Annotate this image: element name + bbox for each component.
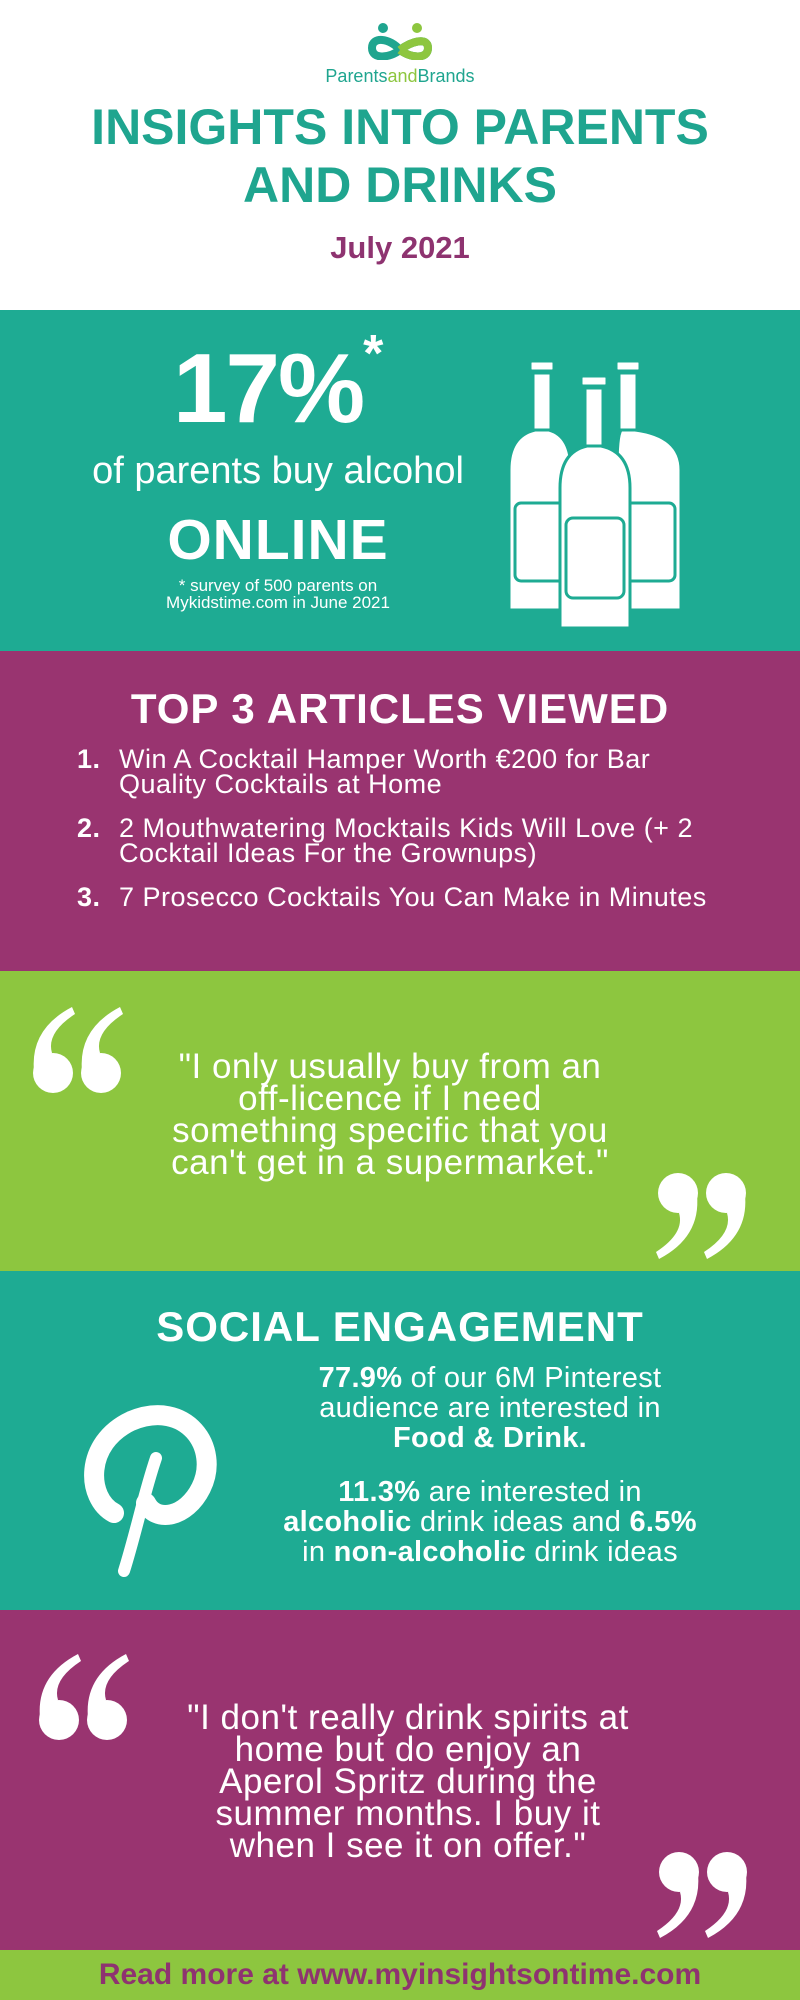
quote text: summer months. I buy it: [216, 1794, 600, 1833]
icon: open quote: [39, 1654, 129, 1740]
quote text: when I see it on offer.": [230, 1826, 586, 1865]
title: AND DRINKS: [243, 157, 557, 213]
title: [91, 99, 709, 213]
stats text: audience are interested in: [319, 1392, 661, 1424]
footer link text: Read more at www.myinsightsontime.com: [99, 1958, 701, 1991]
quote text: home but do enjoy an: [235, 1730, 581, 1769]
stat 17%: 17%*: [173, 325, 381, 443]
footnote: Mykidstime.com in June 2021: [166, 593, 390, 612]
logo: ParentsandBrands: [325, 66, 475, 86]
date: July 2021: [330, 230, 470, 265]
panel: quote 2: [0, 1610, 800, 1950]
online: ONLINE: [167, 508, 389, 572]
footnote: [166, 576, 390, 612]
list: Win A Cocktail Hamper Worth €200 for Bar: [119, 744, 650, 774]
heading: SOCIAL ENGAGEMENT: [156, 1303, 644, 1350]
heading: TOP 3 ARTICLES VIEWED: [131, 685, 669, 732]
panel: online stat: [0, 310, 800, 651]
stats text: alcoholic drink ideas and 6.5%: [283, 1506, 697, 1538]
icon: close quote: [656, 1173, 746, 1259]
list: 1.: [77, 744, 101, 774]
panel: top articles: [0, 651, 800, 971]
logo: [325, 23, 475, 86]
stat text: of parents buy alcohol: [92, 450, 464, 492]
quote text: "I only usually buy from an: [179, 1047, 601, 1086]
footnote: * survey of 500 parents on: [179, 576, 377, 595]
list: 2 Mouthwatering Mocktails Kids Will Love (+ 2: [119, 813, 693, 843]
icon: close quote: [657, 1852, 747, 1938]
list: Cocktail Ideas For the Grownups): [119, 838, 537, 868]
quote text: "I don't really drink spirits at: [187, 1698, 629, 1737]
list: Quality Cocktails at Home: [119, 769, 442, 799]
stats text: in non-alcoholic drink ideas: [302, 1536, 678, 1568]
icon: open quote: [33, 1007, 123, 1093]
title: INSIGHTS INTO PARENTS: [91, 99, 709, 155]
footer: [0, 1950, 800, 2000]
stats text: Food & Drink.: [393, 1422, 587, 1454]
list: [77, 744, 707, 912]
icon: bottles: [510, 362, 680, 626]
quote text: [171, 1047, 609, 1182]
list: 7 Prosecco Cocktails You Can Make in Minutes: [119, 882, 707, 912]
list: 3.: [77, 882, 101, 912]
stats text: 77.9% of our 6M Pinterest: [319, 1362, 661, 1394]
quote text: off-licence if I need: [238, 1079, 542, 1118]
quote text: [187, 1698, 629, 1865]
quote text: something specific that you: [172, 1111, 608, 1150]
icon: pinterest: [84, 1405, 217, 1577]
panel: social engagement: [0, 1271, 800, 1610]
stats text: 11.3% are interested in: [338, 1476, 642, 1508]
stats text: [283, 1362, 697, 1568]
quote text: can't get in a supermarket.": [171, 1143, 609, 1182]
list: 2.: [77, 813, 101, 843]
quote text: Aperol Spritz during the: [219, 1762, 597, 1801]
panel: quote 1: [0, 971, 800, 1271]
